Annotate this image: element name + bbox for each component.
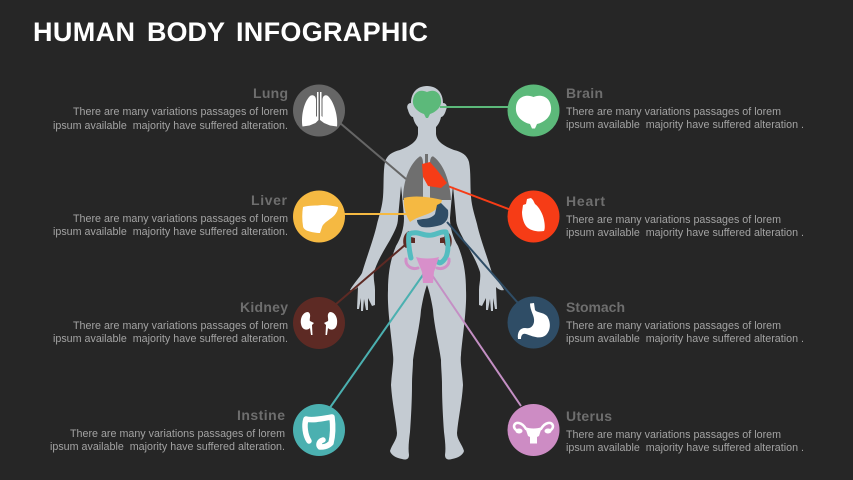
organ: lungs bbox=[403, 154, 451, 200]
organ: ovaries bbox=[406, 259, 449, 269]
text: heart description: There are many variations passages of lorem bbox=[566, 214, 781, 226]
text: instine description: There are many variations passages of lorem bbox=[70, 428, 285, 440]
text: lung description: ipsum available majority have suffered alteration. bbox=[53, 120, 288, 132]
text: lung description bbox=[53, 106, 288, 132]
text: uterus description: There are many variations passages of lorem bbox=[566, 429, 781, 441]
text: kidney description: There are many variations passages of lorem bbox=[73, 320, 288, 332]
text: liver description: ipsum available majority have suffered alteration. bbox=[53, 226, 288, 238]
heading: heart: Heart bbox=[566, 193, 605, 209]
connector: heart bbox=[445, 185, 511, 210]
icon: lungs bbox=[293, 84, 345, 136]
panel: liver bbox=[53, 190, 345, 242]
human body silhouette bbox=[350, 86, 504, 460]
organ: heart bbox=[422, 162, 447, 188]
icon: uterus bbox=[508, 404, 560, 456]
connector: intestine bbox=[329, 272, 425, 409]
title bbox=[33, 17, 428, 47]
connector: brain bbox=[440, 106, 510, 108]
heading: instine: Instine bbox=[237, 407, 285, 423]
title: INFOGRAPHIC bbox=[236, 17, 428, 47]
body organs bbox=[403, 91, 452, 283]
heading: lung: Lung bbox=[253, 85, 288, 101]
text: brain description: There are many variations passages of lorem bbox=[566, 106, 781, 118]
text: brain description: ipsum available majority have suffered alteration . bbox=[566, 119, 804, 131]
text: uterus description bbox=[566, 429, 804, 454]
text: instine description: ipsum available majority have suffered alteration. bbox=[50, 441, 285, 453]
connector: liver bbox=[343, 213, 407, 215]
icon: kidneys bbox=[293, 297, 345, 349]
organ: liver bbox=[404, 197, 442, 222]
organ: kidneys bbox=[403, 231, 452, 248]
panel: stomach bbox=[508, 296, 804, 348]
text: heart description bbox=[566, 214, 804, 239]
text: heart description: ipsum available majority have suffered alteration . bbox=[566, 227, 804, 239]
panel: brain bbox=[508, 84, 804, 136]
panel: uterus bbox=[508, 404, 804, 456]
icon: intestine bbox=[293, 404, 345, 456]
organ: uterus bbox=[416, 257, 439, 283]
title: HUMAN bbox=[33, 17, 135, 47]
icon: liver bbox=[293, 190, 345, 242]
connector: uterus bbox=[430, 272, 521, 406]
organ: brain bbox=[413, 91, 441, 118]
panel: intestine bbox=[50, 404, 345, 456]
text: liver description bbox=[53, 213, 288, 238]
text: lung description: There are many variations passages of lorem bbox=[73, 106, 288, 118]
text: stomach description: ipsum available majority have suffered alteration . bbox=[566, 333, 804, 345]
heading: kidney: Kidney bbox=[240, 299, 288, 315]
text: kidney description: ipsum available majority have suffered alteration. bbox=[53, 333, 288, 345]
heading: liver: Liver bbox=[251, 192, 288, 208]
panel: heart bbox=[508, 190, 804, 242]
text: stomach description: There are many variations passages of lorem bbox=[566, 320, 781, 332]
panel: lung bbox=[53, 84, 345, 136]
icon: stomach bbox=[508, 296, 560, 348]
text: instine description bbox=[50, 428, 285, 453]
text: brain description bbox=[566, 106, 804, 131]
text: uterus description: ipsum available majority have suffered alteration . bbox=[566, 442, 804, 454]
organ: intestine bbox=[409, 232, 448, 263]
panel: kidney bbox=[53, 297, 345, 349]
text: kidney description bbox=[53, 320, 288, 345]
heading: uterus: Uterus bbox=[566, 408, 612, 424]
organ: stomach bbox=[417, 203, 448, 227]
heading: brain: Brain bbox=[566, 85, 603, 101]
icon: heart bbox=[508, 190, 560, 242]
heading: stomach: Stomach bbox=[566, 299, 625, 315]
connector: lung bbox=[340, 123, 406, 179]
text: stomach description bbox=[566, 320, 804, 345]
icon: brain bbox=[508, 84, 560, 136]
connector: kidney bbox=[335, 245, 405, 305]
text: liver description: There are many variations passages of lorem bbox=[73, 213, 288, 225]
title: BODY bbox=[147, 17, 225, 47]
connector: stomach bbox=[447, 222, 518, 303]
